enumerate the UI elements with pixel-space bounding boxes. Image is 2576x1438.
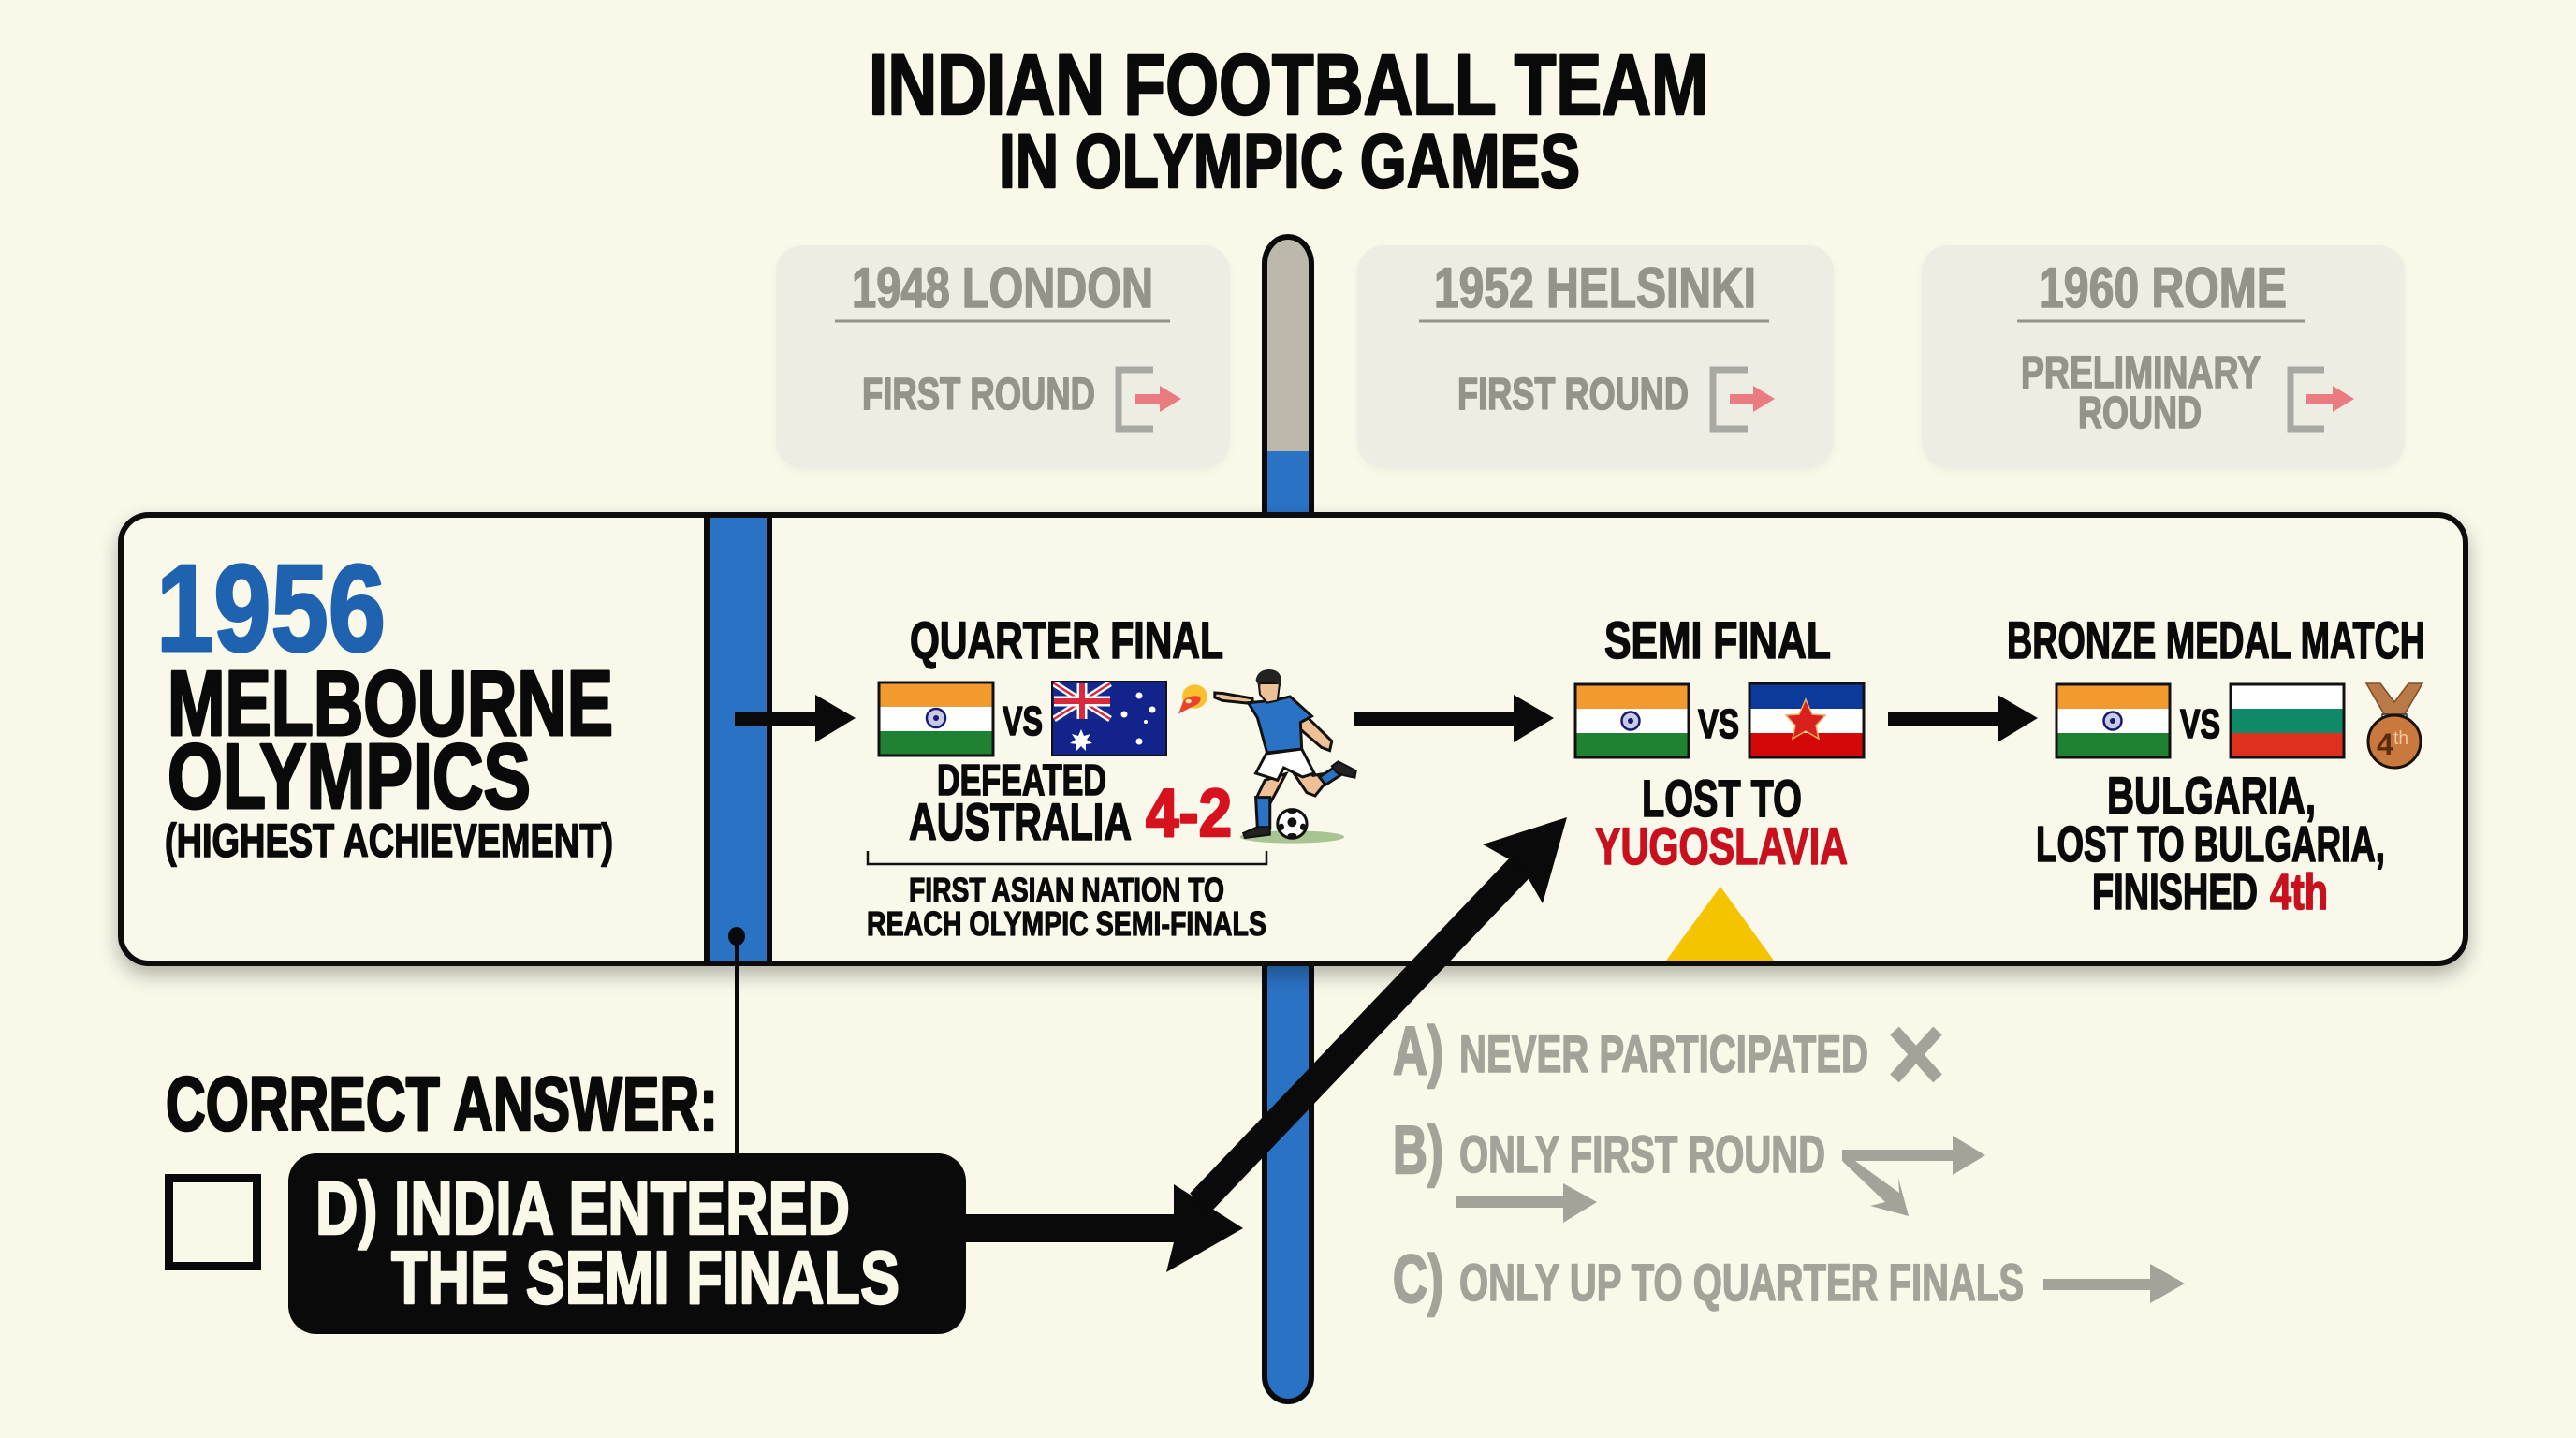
icon: bronze medal: 4 (2377, 727, 2393, 761)
panel: 1960 Rome (1922, 245, 2405, 468)
flag: India (1575, 684, 1689, 757)
bronze medal match block: FINISHED (2092, 864, 2258, 920)
bronze medal match block: BULGARIA, (2107, 766, 2316, 825)
icon: cross (1895, 1031, 1938, 1078)
bronze medal match block (2007, 610, 2425, 920)
semi final block: VS (1698, 701, 1739, 747)
semi final block: LOST TO (1642, 769, 1802, 828)
semi final block (1575, 610, 1864, 875)
option A (1393, 1014, 1938, 1089)
answer box: THE SEMI FINALS (391, 1236, 900, 1319)
panel: 1956 Melbourne Olympics (121, 515, 2466, 963)
panel: 1952 Helsinki: 1952 HELSINKI (1434, 257, 1756, 319)
title: IN OLYMPIC GAMES (999, 119, 1580, 204)
connector line from band to answer (728, 927, 745, 1155)
semi final block: SEMI FINAL (1604, 610, 1831, 669)
quarter final block: FIRST ASIAN NATION TO (909, 871, 1224, 909)
option C: C) (1393, 1242, 1443, 1317)
arrow to quarter final (735, 695, 856, 742)
panel: 1960 Rome: 1960 ROME (2039, 257, 2287, 319)
icon: split arrows (1456, 1136, 1985, 1223)
flag: Yugoslavia (1749, 683, 1864, 757)
panel: 1960 Rome: PRELIMINARY (2021, 348, 2261, 398)
flag: Australia (1052, 682, 1166, 756)
icon: bronze medal: th (2393, 728, 2408, 749)
bracket (868, 851, 1266, 864)
year heading: OLYMPICS (168, 725, 531, 828)
checkbox (168, 1178, 256, 1266)
option B: ONLY FIRST ROUND (1459, 1124, 1825, 1183)
icon: arrow (2043, 1264, 2185, 1303)
year heading (156, 539, 613, 867)
bronze medal match block: LOST TO BULGARIA, (2036, 816, 2385, 873)
year heading: MELBOURNE (168, 652, 613, 755)
option C (1393, 1242, 2185, 1317)
panel: 1952 Helsinki (1357, 245, 1834, 468)
heading: correct answer: CORRECT ANSWER: (166, 1062, 718, 1147)
icon: exit arrow 1952 (1713, 370, 1775, 429)
flame ball (1178, 684, 1208, 714)
option B (1393, 1113, 1985, 1223)
arrow from answer box (964, 1184, 1243, 1272)
quarter final block: AUSTRALIA (909, 792, 1132, 851)
icon: bronze medal (2366, 683, 2422, 768)
panel: 1960 Rome: ROUND (2078, 389, 2202, 438)
year heading: 1956 (156, 539, 386, 677)
yellow triangle marker (1666, 887, 1774, 961)
bronze medal match block: VS (2180, 701, 2220, 747)
quarter final block: DEFEATED (937, 756, 1106, 804)
icon: exit arrow 1948 (1119, 370, 1181, 429)
bronze medal match block: 4th (2270, 864, 2328, 920)
quarter final block: REACH OLYMPIC SEMI-FINALS (867, 904, 1266, 943)
title (869, 37, 1708, 204)
quarter final block (867, 610, 1266, 943)
quarter final block: 4-2 (1146, 776, 1232, 851)
arrow to semi final (1354, 695, 1554, 742)
diagonal arrow to semi final (1200, 817, 1567, 1203)
soccer ball (1278, 810, 1307, 838)
icon: exit arrow 1960 (2291, 370, 2354, 429)
title: INDIAN FOOTBALL TEAM (869, 37, 1708, 133)
timeline bar (1265, 237, 1311, 1401)
panel: 1952 Helsinki: FIRST ROUND (1457, 370, 1689, 419)
quarter final block: QUARTER FINAL (910, 610, 1223, 669)
year heading: (HIGHEST ACHIEVEMENT) (165, 814, 613, 867)
arrow to bronze medal match (1888, 695, 2038, 742)
panel: 1948 London: 1948 LONDON (852, 257, 1153, 319)
option B: B) (1393, 1113, 1443, 1188)
answer box (288, 1153, 966, 1334)
answer box: D) INDIA ENTERED (315, 1167, 850, 1250)
option C: ONLY UP TO QUARTER FINALS (1459, 1253, 2024, 1312)
icon: football player kicking (1178, 669, 1356, 844)
panel: 1948 London (776, 245, 1230, 468)
option A: NEVER PARTICIPATED (1459, 1024, 1868, 1083)
option A: A) (1393, 1014, 1443, 1089)
blue timeline band (707, 515, 769, 963)
flag: India (879, 682, 993, 756)
semi final block: YUGOSLAVIA (1595, 816, 1848, 875)
flag: Bulgaria (2231, 684, 2344, 757)
panel: 1948 London: FIRST ROUND (862, 370, 1095, 419)
flag: India (2056, 684, 2170, 757)
quarter final block: VS (1003, 698, 1043, 744)
